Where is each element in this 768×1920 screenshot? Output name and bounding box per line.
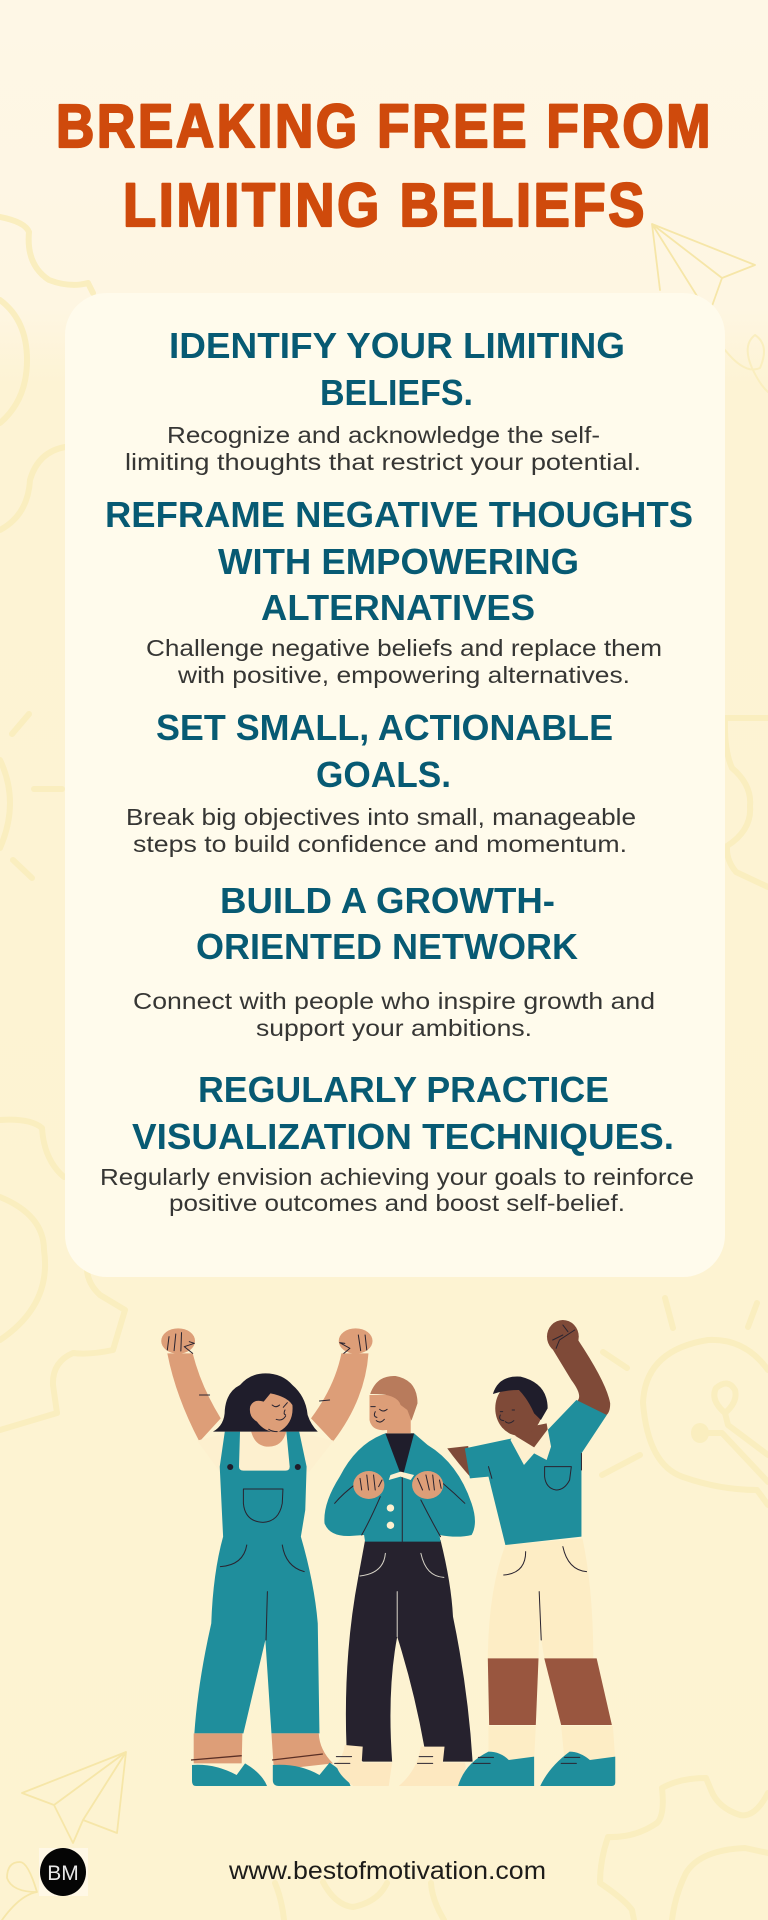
section: set small goals: [126, 707, 636, 857]
text block: Break big objectives into small, manageable: [126, 804, 636, 830]
text block: Recognize and acknowledge the self-: [167, 422, 600, 448]
text block: with positive, empowering alternatives.: [177, 662, 630, 688]
text block: [126, 804, 636, 857]
section: growth-oriented network: [133, 880, 655, 1041]
panel: content card: [65, 293, 725, 1277]
text block: support your ambitions.: [256, 1015, 532, 1041]
text block: [133, 988, 655, 1041]
section: reframe negative thoughts: [105, 494, 693, 688]
logo: BM badge: [39, 1848, 88, 1896]
heading: [105, 494, 693, 628]
heading: WITH EMPOWERING: [218, 541, 579, 582]
person: woman in overalls: [161, 1328, 373, 1786]
text block: limiting thoughts that restrict your potential.: [125, 449, 641, 475]
text block: [125, 422, 641, 475]
heading: REGULARLY PRACTICE: [198, 1069, 609, 1110]
person: man in cardigan and black trousers: [324, 1376, 475, 1786]
icon: paper plane bottom: [22, 1752, 126, 1843]
text block: Challenge negative beliefs and replace them: [146, 635, 662, 661]
heading: IDENTIFY YOUR LIMITING: [169, 325, 625, 366]
website url: www.bestofmotivation.com: [228, 1857, 546, 1885]
section: identify limiting beliefs: [125, 325, 641, 475]
icon: paper plane top: [652, 224, 755, 306]
heading: [132, 1069, 674, 1157]
text block: [146, 635, 662, 688]
heading: GOALS.: [316, 754, 451, 795]
icon: string curl bottom left: [2, 1862, 37, 1920]
title: LIMITING BELIEFS: [123, 171, 647, 239]
text block: steps to build confidence and momentum.: [133, 831, 627, 857]
heading: VISUALIZATION TECHNIQUES.: [132, 1116, 674, 1157]
text block: Regularly envision achieving your goals to reinforce: [100, 1164, 694, 1190]
heading: SET SMALL, ACTIONABLE: [156, 707, 613, 748]
heading: ALTERNATIVES: [261, 587, 535, 628]
heading: BUILD A GROWTH-: [220, 880, 555, 921]
heading: [169, 325, 625, 413]
text block: Connect with people who inspire growth and: [133, 988, 655, 1014]
person: man in polo shirt and shorts: [447, 1320, 615, 1786]
heading: REFRAME NEGATIVE THOUGHTS: [105, 494, 693, 535]
text block: [100, 1164, 694, 1216]
heading: [196, 880, 578, 967]
title: [56, 92, 713, 239]
heading: ORIENTED NETWORK: [196, 926, 578, 967]
text block: positive outcomes and boost self-belief.: [169, 1190, 625, 1216]
logo: BM badge: BM: [47, 1862, 79, 1885]
heading: BELIEFS.: [320, 372, 473, 413]
heading: [156, 707, 613, 795]
section: visualization techniques: [100, 1069, 694, 1216]
illustration: three cheering people: [161, 1320, 615, 1786]
